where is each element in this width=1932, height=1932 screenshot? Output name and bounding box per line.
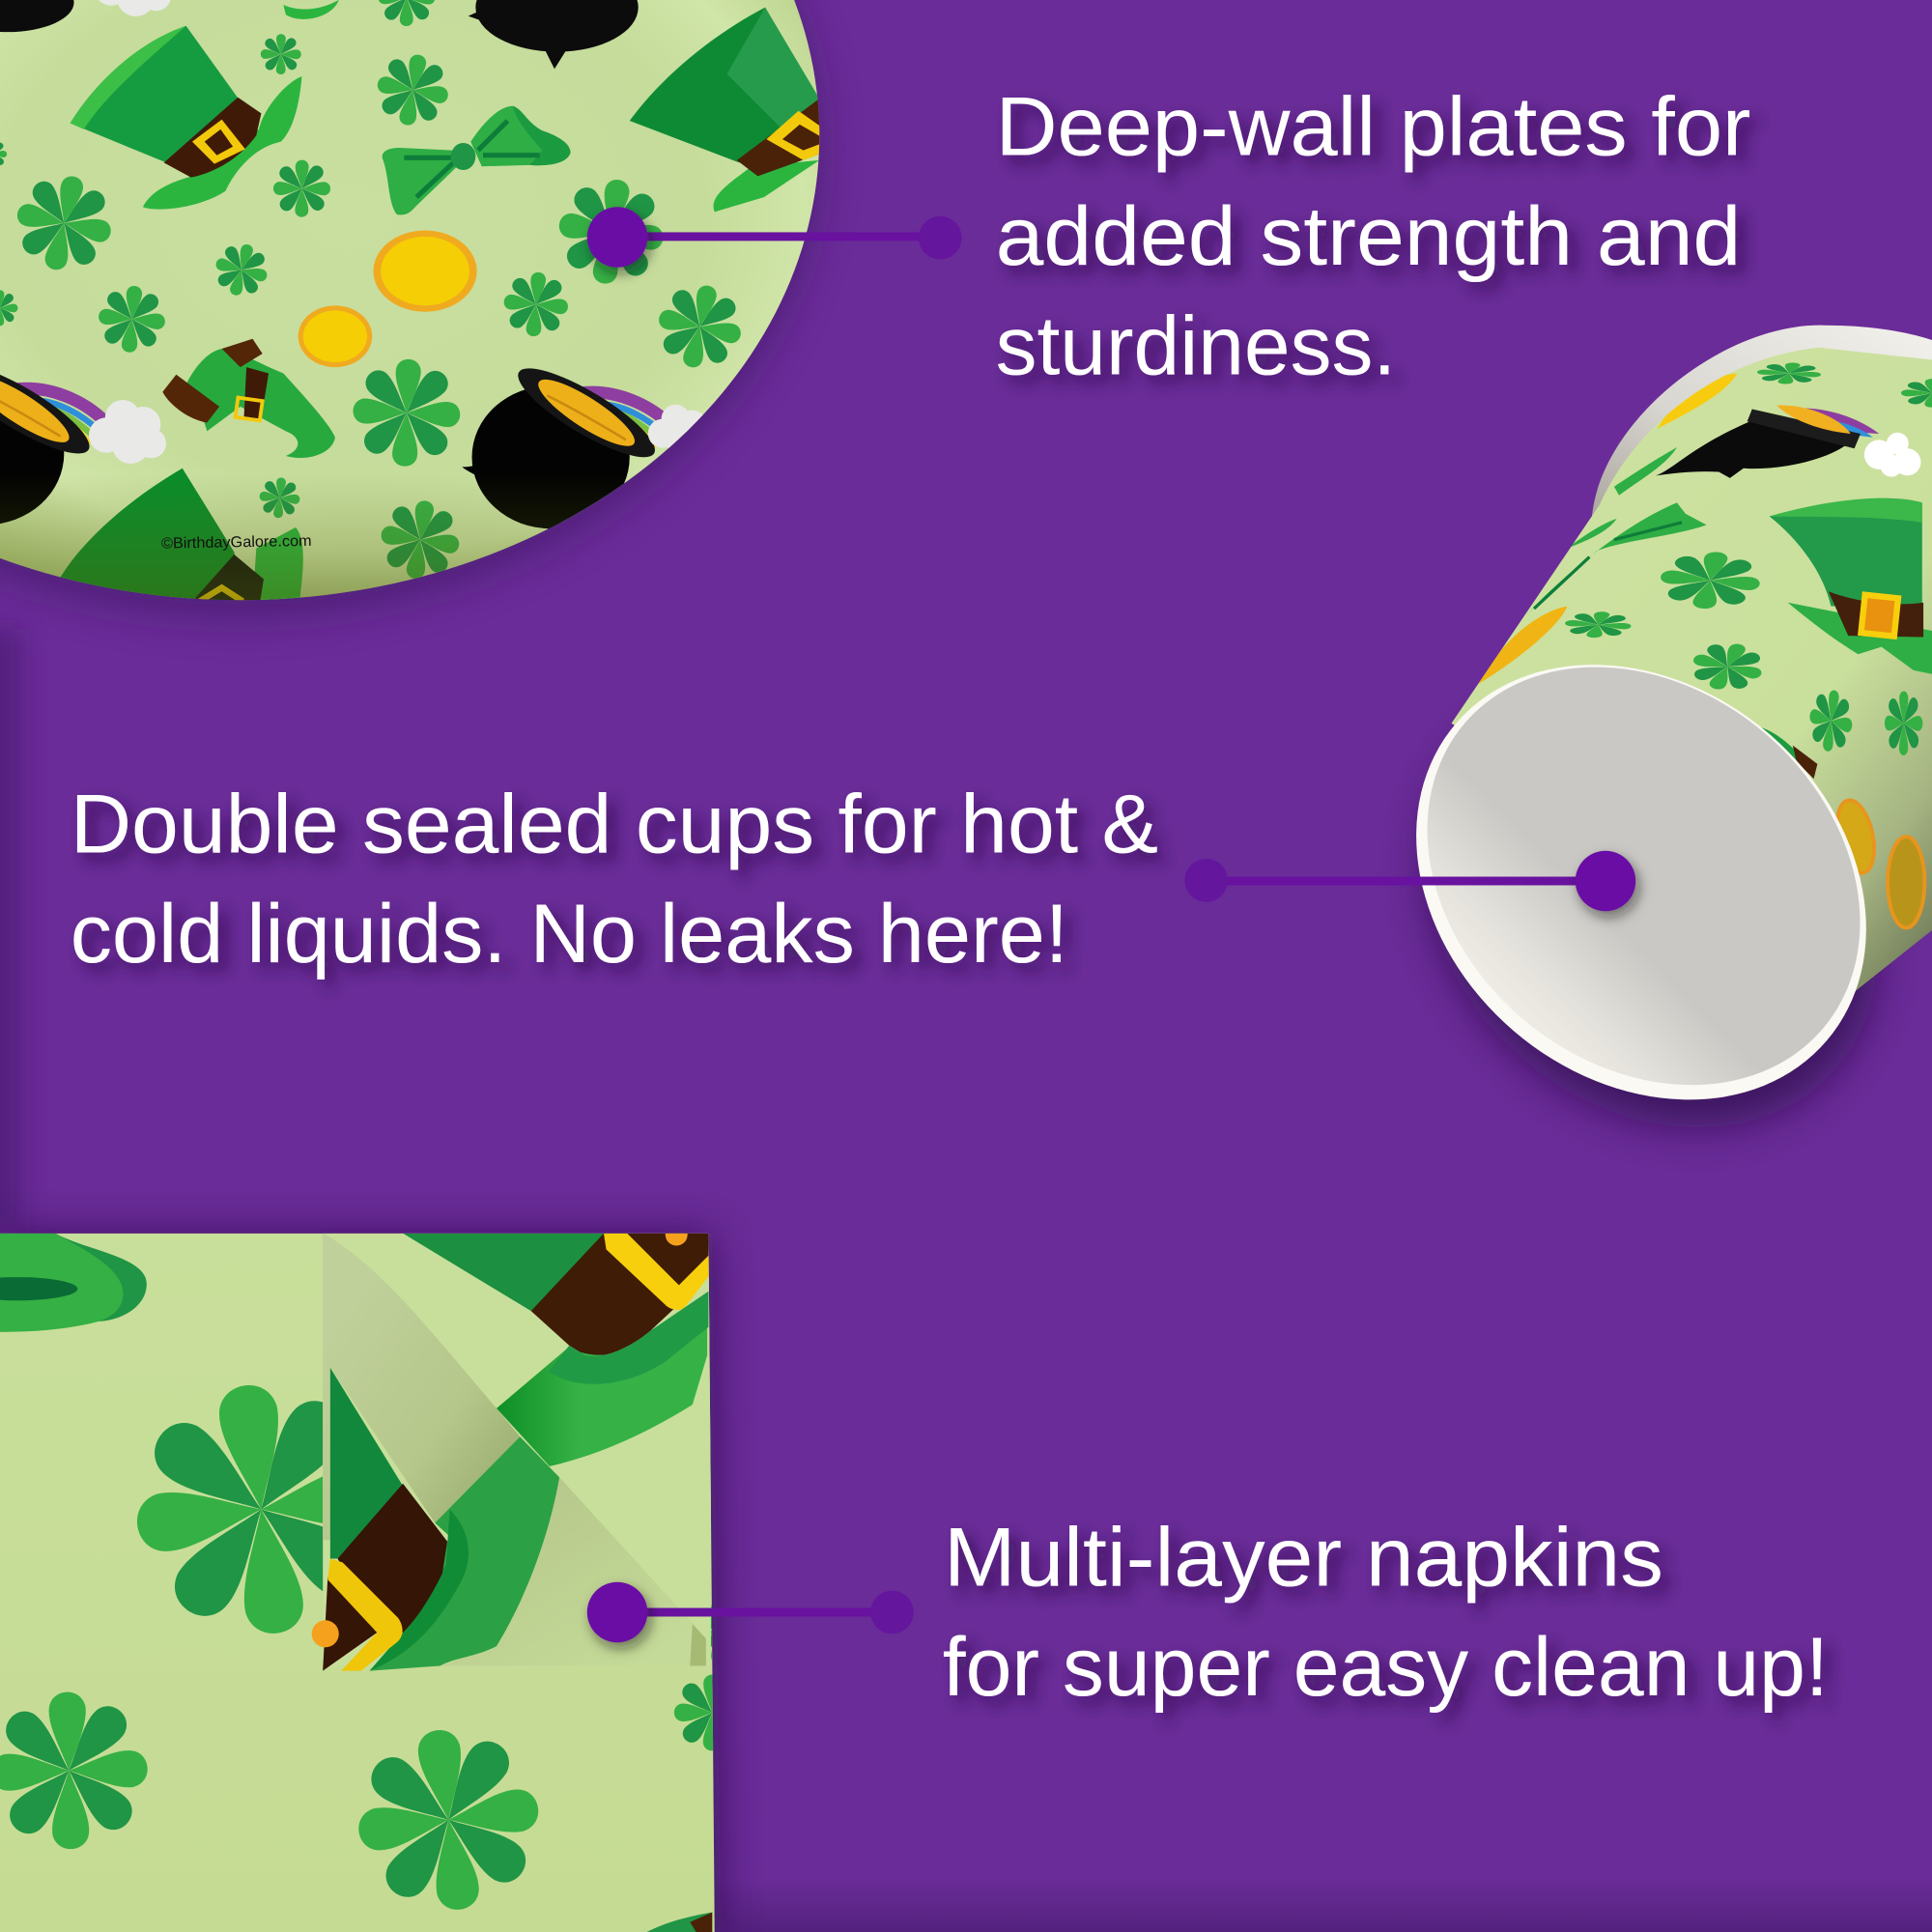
hat brim on flap (497, 1327, 707, 1466)
text: napkin caption: for super easy clean up! (943, 1620, 1829, 1714)
connector: napkin callout (587, 1582, 914, 1642)
text: cup caption: Double sealed cups for hot & (71, 778, 1158, 871)
cup inner base (1343, 581, 1932, 1172)
panel: paper napkin (0, 1224, 751, 1932)
icon: lower hat (58, 469, 303, 610)
icon: lower shamrock (358, 1730, 539, 1910)
napkin fold flap (312, 1224, 711, 1671)
icon: hat brim top left (0, 1234, 147, 1332)
icon: large shamrock (137, 1385, 323, 1634)
text: plate caption: Deep-wall plates for (996, 80, 1750, 174)
icon: leprechaun hat (71, 26, 302, 210)
icon: plate shamrocks (0, 0, 750, 584)
text: plate caption: added strength and (996, 189, 1741, 283)
lower hat on fold (330, 1368, 403, 1559)
plate rim shading (0, 489, 604, 601)
plate copyright text: ©BirthdayGalore.com (161, 533, 312, 553)
icon: green bow tie (383, 106, 571, 214)
text: plate caption: sturdiness. (996, 299, 1396, 393)
icon: pots of gold (0, 0, 711, 542)
text: cup caption (71, 778, 1158, 980)
connector: plate callout (587, 207, 962, 268)
text: cup caption: cold liquids. No leaks here! (71, 887, 1068, 980)
fold back side (323, 1234, 520, 1540)
icon: cup pot of gold (1656, 406, 1921, 478)
icon: cup shamrocks (1560, 361, 1932, 1014)
panel: paper cup (1406, 325, 1932, 1148)
icon: wrinkled hat at plate rim (630, 8, 826, 212)
panel: paper plate (0, 0, 850, 629)
icon: leprechaun boot (162, 339, 335, 458)
text: napkin caption: Multi-layer napkins (944, 1511, 1663, 1605)
icon: gold coins (298, 231, 477, 367)
hat band on flap (403, 1234, 609, 1311)
icon: cup hat (1770, 498, 1932, 674)
cup base rim (1328, 575, 1932, 1189)
icon: cup flattened bow (1525, 447, 1707, 616)
text: plate caption (996, 80, 1750, 393)
icon: lower left shamrock (0, 1690, 150, 1852)
text: napkin caption (943, 1511, 1829, 1714)
icon: right edge shamrocks (647, 1605, 713, 1932)
connector: cup callout (1184, 851, 1635, 911)
icon: cup coins (1479, 373, 1924, 927)
